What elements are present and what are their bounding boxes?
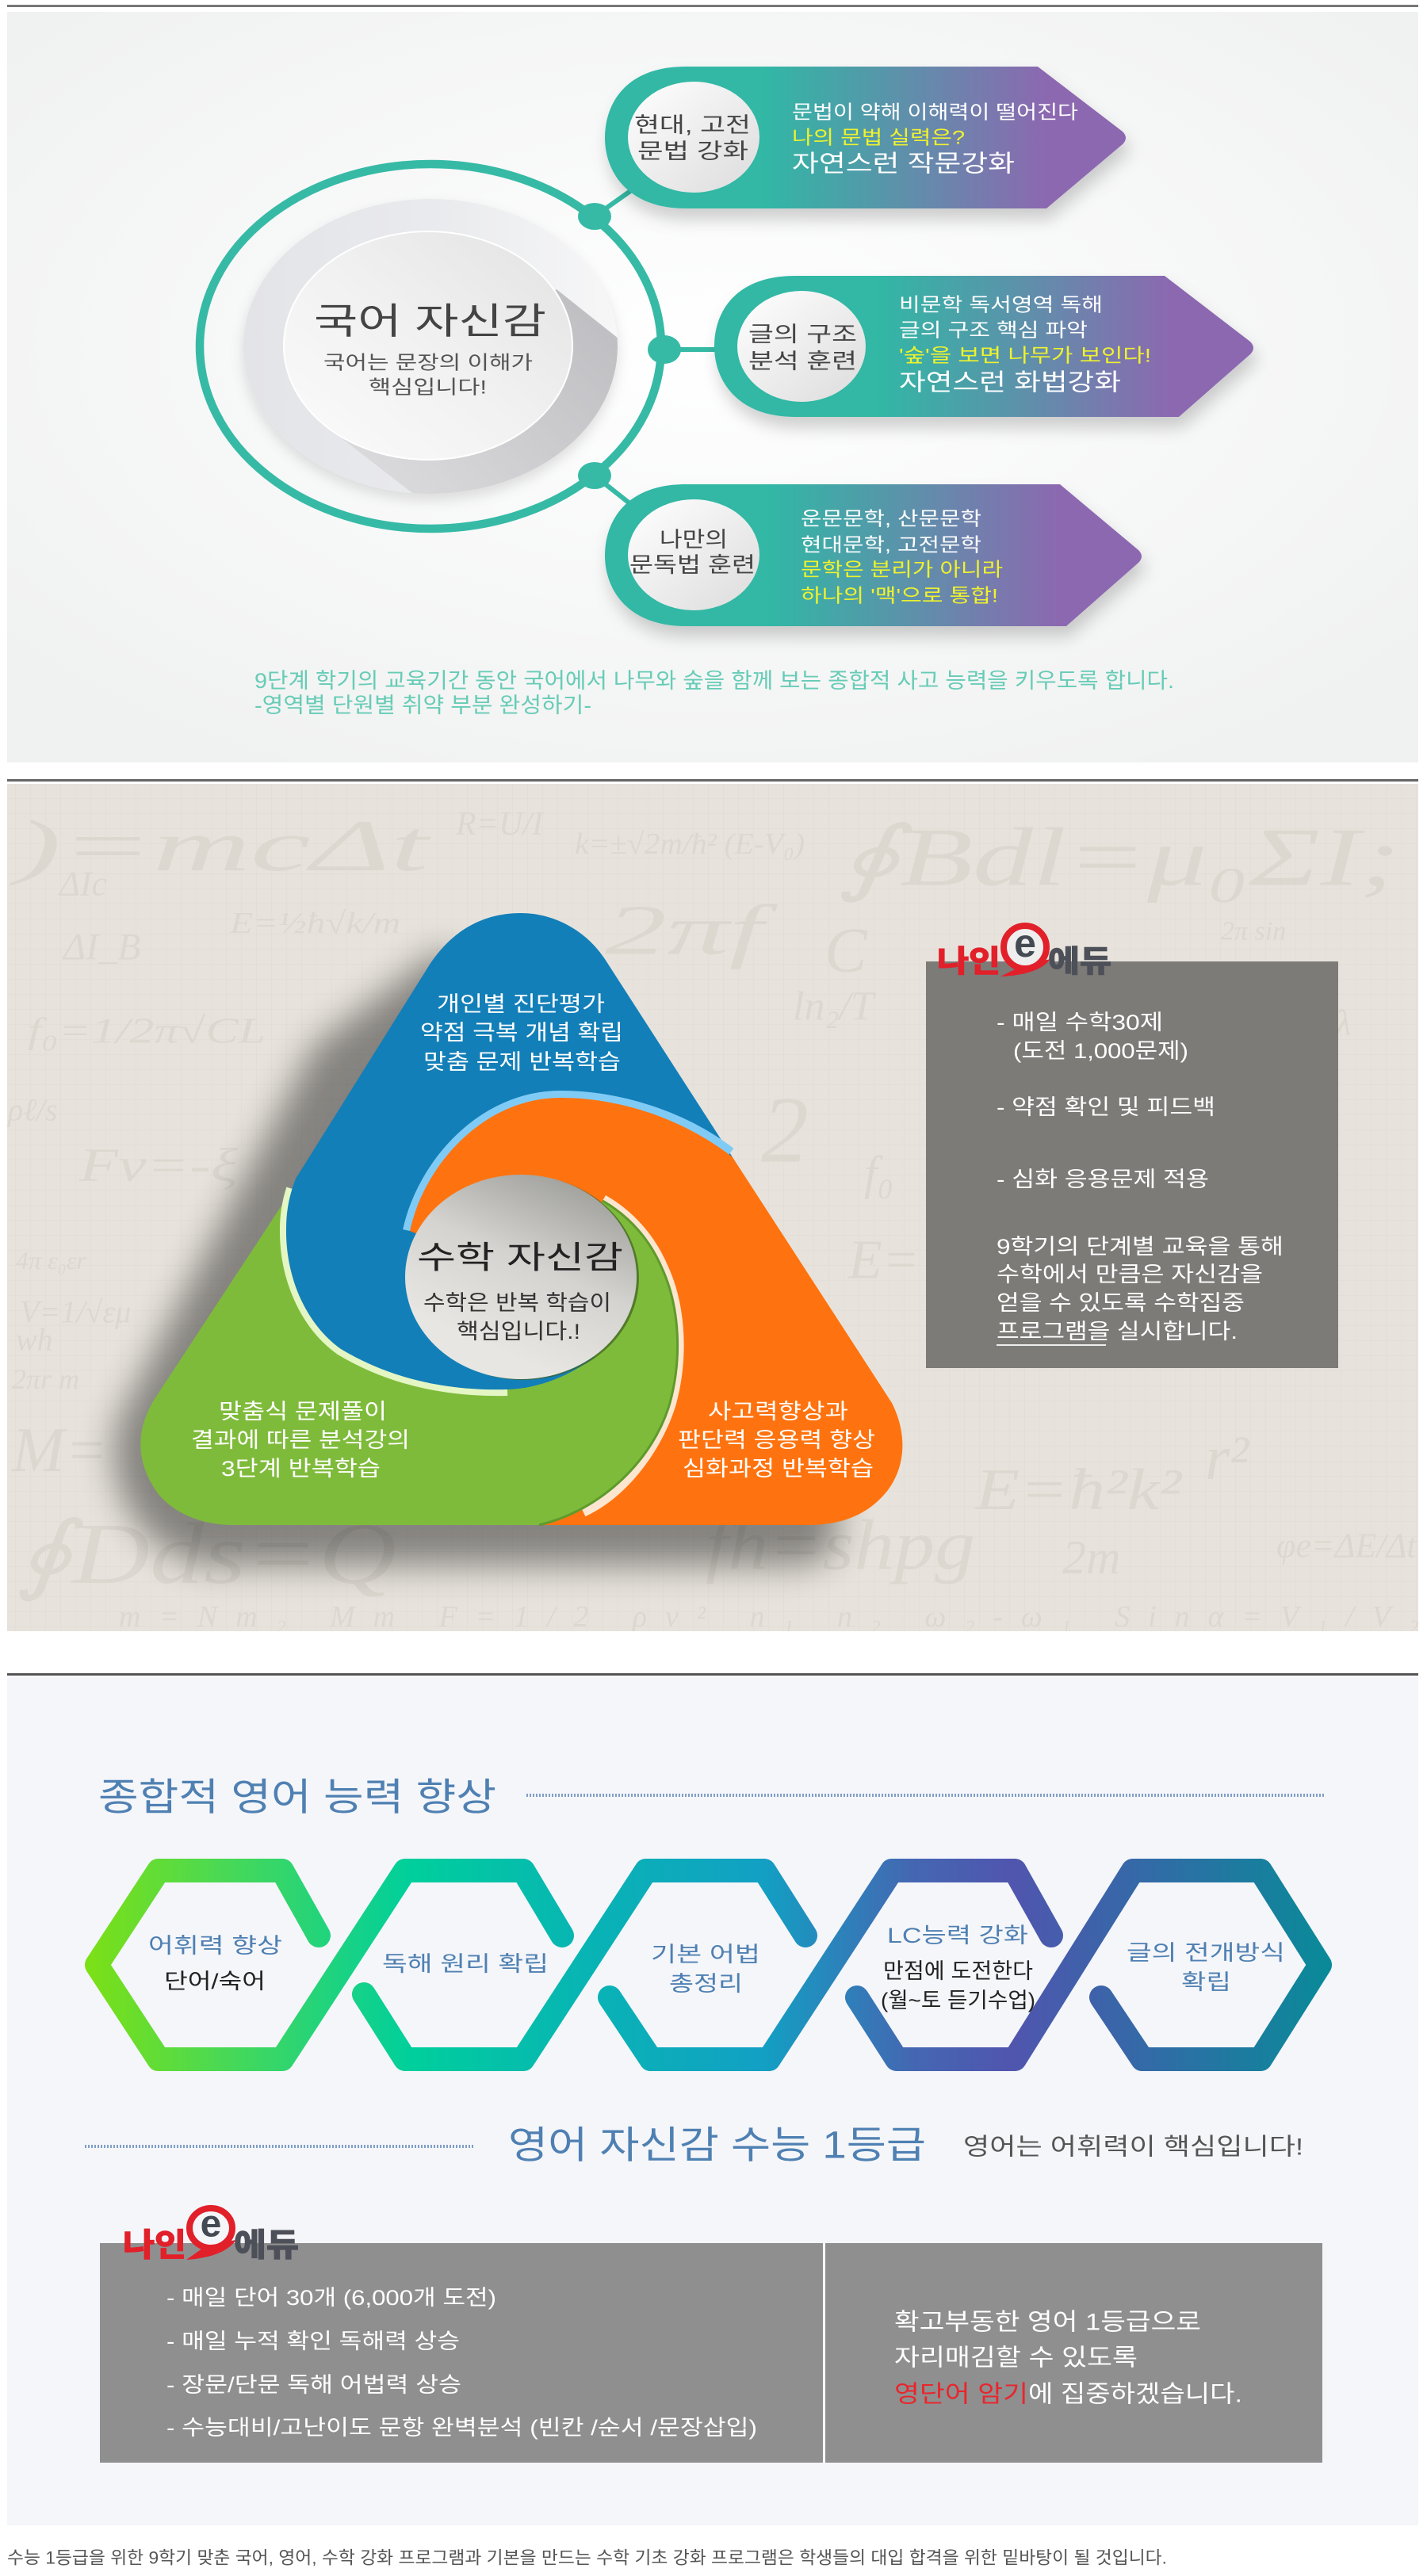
pill: text structure: 자연스런 화법강화 (899, 369, 1121, 396)
pill: literature: 나만의 (660, 528, 728, 552)
panel: math confidence (6, 779, 1419, 1634)
text: green segment (191, 1400, 410, 1481)
step 4: (월~토 듣기수업) (881, 1989, 1035, 2012)
background formulas: f₀=1/2π√CL (28, 1010, 266, 1051)
background formulas: φe=ΔE/Δt (1276, 1527, 1417, 1565)
step 3 (651, 1943, 760, 1996)
background formulas: μ₁I₁I₂ (1252, 1167, 1312, 1195)
pill: literature: 현대문학, 고전문학 (801, 534, 981, 556)
step 1: 어휘력 향상 (148, 1934, 282, 1958)
step 1: 단어/숙어 (164, 1970, 266, 1993)
pill: literature: 하나의 '맥'으로 통합! (801, 585, 998, 607)
background formulas: E=½ħ√k/m (229, 907, 400, 940)
background formulas: M= (11, 1416, 108, 1485)
step 5: 글의 전개방식 (1127, 1941, 1285, 1965)
pill: literature: 운문문학, 산문문학 (801, 509, 981, 529)
background formulas: R=U/I (455, 806, 545, 843)
pill: grammar: 문법이 약해 이해력이 떨어진다 (792, 101, 1078, 124)
hexagon chain (97, 1871, 1320, 2059)
background formulas: fh=shpg (706, 1506, 975, 1585)
caption (254, 669, 1174, 717)
central ring diagram (200, 164, 661, 555)
pill: text structure: 글의 구조 핵심 파악 (899, 320, 1088, 341)
list: - 장문/단문 독해 어법력 상승 (166, 2373, 461, 2397)
heading: overall English: 종합적 영어 능력 향상 (98, 1777, 496, 1818)
panel: Korean confidence (7, 5, 1418, 762)
step 4: LC능력 강화 (887, 1924, 1028, 1947)
text: blue segment: 개인별 진단평가 (437, 992, 605, 1016)
message: 영단어 암기 (894, 2381, 1028, 2408)
text: blue segment: 맞춤 문제 반복학습 (423, 1050, 621, 1074)
text box: math program: 9학기의 단계별 교육을 통해 (997, 1235, 1284, 1259)
text: orange segment: 심화과정 반복학습 (683, 1457, 874, 1481)
background formulas: m=Nm₂ Mm F=1/2 ρv² n₁ n₂ ω₂-ω₁ Sinα=V₁/V₂ (119, 1600, 1419, 1634)
light blue crescent (410, 1098, 729, 1231)
logo: nine e edu (123, 2203, 299, 2263)
text box: math program (926, 961, 1338, 1368)
heading: Korean confidence: 국어 자신감 (314, 300, 546, 342)
text: center: 수학은 반복 학습이 (423, 1291, 611, 1315)
background formulas: V=1/√εμ (20, 1294, 131, 1330)
pill: grammar: 나의 문법 실력은? (792, 127, 965, 149)
center hole (405, 1175, 637, 1379)
pill: grammar (605, 67, 1126, 208)
pill: text structure: 비문학 독서영역 독해 (899, 295, 1103, 315)
list: - 매일 누적 확인 독해력 상승 (166, 2329, 460, 2353)
list: - 수능대비/고난이도 문항 완벽분석 (빈칸 /순서 /문장삽입) (166, 2416, 757, 2440)
segment: green overlap (476, 1201, 678, 1525)
text box: math program: - 매일 수학30제 (997, 1011, 1163, 1034)
gray info box (100, 2243, 1322, 2463)
background formulas: 2m (1062, 1531, 1120, 1584)
logo: nine e edu: e (1014, 921, 1036, 965)
heading: English grade one: 영어 자신감 수능 1등급 (508, 2124, 926, 2167)
heading: Korean confidence (314, 300, 546, 398)
segment: green base (140, 1191, 678, 1525)
background formulas: ∮Dds=Q (16, 1505, 396, 1602)
text box: math program: 수학에서 만큼은 자신감을 (997, 1263, 1263, 1286)
background formulas: ln₂/T (793, 984, 876, 1029)
background formulas: k=±√2m/ħ² (E-V₀) (575, 827, 805, 861)
list (166, 2286, 757, 2440)
text: blue segment (420, 992, 623, 1074)
cream edge (583, 1201, 678, 1511)
background formulas: Fv=-ξ (78, 1139, 238, 1191)
green edge shade (539, 1201, 678, 1525)
background formulas: ∬ Dds = AD (975, 975, 1213, 1015)
background formulas: 2 (761, 1076, 809, 1183)
segment: orange (410, 1098, 902, 1525)
text: orange segment (678, 1400, 875, 1481)
pill: grammar: 문법 강화 (637, 140, 748, 163)
logo: nine e edu: 나인 (937, 946, 1000, 979)
background formulas: 2π sin (1221, 916, 1286, 946)
background formulas: r² (1205, 1424, 1250, 1493)
text: center (417, 1240, 623, 1343)
pill: literature: 문독법 훈련 (629, 553, 756, 577)
step 2: 독해 원리 확립 (382, 1952, 549, 1976)
text: center: 수학 자신감 (417, 1240, 623, 1275)
pill: text structure: 글의 구조 (748, 323, 857, 346)
logo: nine e edu: 에듀 (234, 2228, 299, 2263)
heading: Korean confidence: 핵심입니다! (369, 377, 487, 398)
text box: math program: - 약점 확인 및 피드백 (997, 1095, 1215, 1119)
background formulas: 4π ε₀εr (16, 1246, 86, 1275)
text box: math program: (도전 1,000문제) (1013, 1039, 1188, 1063)
text: orange segment: 판단력 응용력 향상 (678, 1428, 875, 1452)
step 5 (1127, 1941, 1285, 1994)
pale edge under blue (286, 1189, 507, 1389)
background formulas: 2πr m (12, 1363, 79, 1395)
footer note: 수능 1등급을 위한 9학기 맞춘 국어, 영어, 수학 강화 프로그램과 기본을 만드는 수학 기초 강화 프로그램은 학생들의 대입 합격을 위한 밑바탕이 될 것입니다. (7, 2547, 1167, 2568)
background formulas: wh (16, 1322, 53, 1357)
background formulas: ∮Bdl=μ₀ΣI; (837, 810, 1400, 904)
list: - 매일 단어 30개 (6,000개 도전) (166, 2286, 496, 2310)
background formulas (6, 805, 1419, 1634)
triangle shadow (113, 949, 840, 1565)
text box: math program: 프로그램을 실시합니다. (997, 1320, 1238, 1343)
text: green segment: 맞춤식 문제풀이 (219, 1400, 387, 1424)
connectors (578, 189, 717, 506)
step 4: 만점에 도전한다 (883, 1959, 1033, 1983)
background formulas: )=mcΔt (9, 805, 432, 886)
text: green segment: 결과에 따른 분석강의 (191, 1428, 410, 1452)
hole shadow (407, 1175, 639, 1380)
background formulas: f₀ (864, 1147, 894, 1199)
step 4 (881, 1924, 1035, 2012)
pill: grammar: 현대, 고전 (634, 113, 751, 137)
message: 자리매김할 수 있도록 (894, 2345, 1138, 2372)
step 5: 확립 (1181, 1970, 1231, 1994)
pill: text structure (714, 276, 1253, 417)
caption: -영역별 단원별 취약 부분 완성하기- (254, 694, 591, 717)
background formulas: E= (847, 1230, 920, 1290)
message: 확고부동한 영어 1등급으로 (894, 2310, 1201, 2335)
logo: nine e edu: e (201, 2203, 221, 2245)
pill: grammar: 자연스런 작문강화 (792, 151, 1015, 178)
text: orange segment: 사고력향상과 (708, 1400, 848, 1424)
background formulas: ΔIc (58, 864, 107, 904)
text box: math program: - 심화 응용문제 적용 (997, 1168, 1209, 1191)
background formulas: ΔI_B (62, 926, 140, 969)
background formulas: E=ħ²k² (974, 1458, 1183, 1523)
text: blue segment: 약점 극복 개념 확립 (420, 1021, 623, 1045)
message: 에 집중하겠습니다. (1028, 2381, 1242, 2408)
panel: English confidence (7, 1673, 1418, 2525)
pill: literature: 문학은 분리가 아니라 (801, 560, 1003, 580)
background formulas: C (824, 916, 868, 986)
heading: English grade one (85, 2124, 1303, 2167)
logo: nine e edu: 나인 (123, 2228, 186, 2263)
logo: nine e edu: 에듀 (1048, 946, 1111, 979)
step 3: 기본 어법 (651, 1943, 760, 1966)
step 1 (148, 1934, 282, 1993)
triangle diagram (140, 913, 902, 1525)
text: center: 핵심입니다.! (457, 1320, 580, 1343)
text: green segment: 3단계 반복학습 (221, 1457, 381, 1481)
step 3: 총정리 (669, 1972, 743, 1996)
caption: 9단계 학기의 교육기간 동안 국어에서 나무와 숲을 함께 보는 종합적 사고 능력을 키우도록 합니다. (254, 669, 1174, 693)
pill: text structure: 분석 훈련 (748, 350, 857, 373)
text box: math program: 얻을 수 있도록 수학집중 (997, 1291, 1245, 1315)
background formulas: v=c/λ (1268, 1002, 1352, 1043)
background formulas: 2πf (605, 891, 779, 970)
logo: nine e edu (937, 921, 1111, 979)
message (894, 2310, 1242, 2408)
pill: text structure: '숲'을 보면 나무가 보인다! (899, 346, 1151, 366)
heading: Korean confidence: 국어는 문장의 이해가 (323, 352, 533, 374)
heading: English grade one: 영어는 어휘력이 핵심입니다! (963, 2134, 1303, 2161)
segment: blue (286, 913, 733, 1389)
pill: literature (605, 484, 1142, 626)
background formulas: ρℓ/s (6, 1092, 58, 1127)
